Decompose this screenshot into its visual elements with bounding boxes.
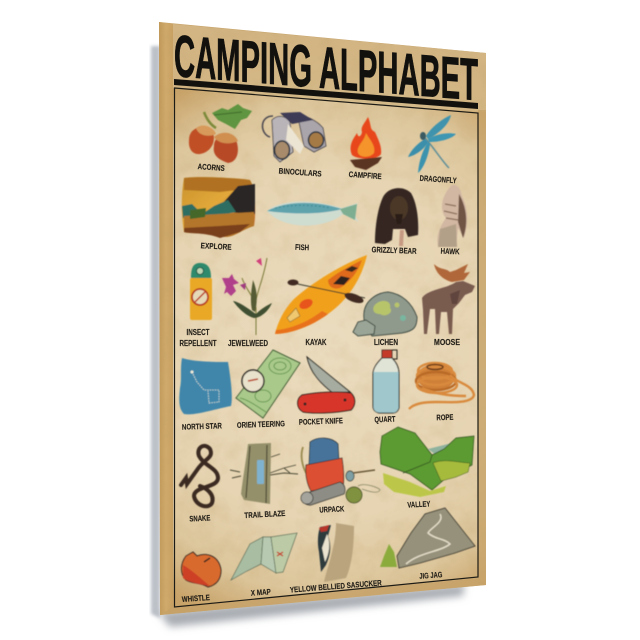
icon: hawk: [437, 185, 467, 247]
item: dragonfly: [408, 115, 457, 185]
item: x map: [231, 533, 297, 598]
icon: campfire: [350, 117, 382, 170]
icon: moose: [422, 264, 475, 334]
item: quart: [373, 350, 399, 424]
icon: mountain with switchback trail: [380, 508, 475, 568]
label: insect repellent: REPELLENT: [180, 339, 217, 348]
label: dragonfly: DRAGONFLY: [419, 174, 457, 185]
label: jewelweed: JEWELWEED: [228, 339, 268, 348]
label: explore: EXPLORE: [200, 241, 232, 252]
icon: backpack and gear: [301, 438, 380, 505]
icon: north star map: [179, 358, 232, 414]
icon: topographic map and compass: [236, 350, 300, 418]
label: valley: VALLEY: [407, 499, 431, 510]
icon: kayak with paddle: [275, 255, 367, 334]
icon: explore landscape: [182, 177, 255, 238]
label: whistle: WHISTLE: [182, 593, 211, 604]
item: snake: [181, 446, 218, 524]
label: rope: ROPE: [436, 413, 454, 422]
icon: binoculars: [262, 112, 326, 162]
label: acorns: ACORNS: [197, 162, 225, 173]
label: quart: QUART: [374, 415, 396, 424]
icon: orange whistle: [182, 552, 221, 587]
item: campfire: [348, 117, 382, 181]
label: fish: FISH: [295, 243, 309, 252]
item: urpack: [301, 438, 380, 515]
label: north star: NORTH STAR: [182, 421, 222, 432]
label: zig zag: JIG JAG: [419, 570, 443, 581]
label: hawk: HAWK: [440, 247, 460, 256]
item: lichen: [353, 292, 417, 347]
label: trail blaze: TRAIL BLAZE: [244, 509, 286, 520]
item: pocket knife: [298, 357, 355, 427]
icon: insect repellent can: [190, 263, 212, 320]
icon: tree with blaze: [230, 443, 298, 504]
item: north star: [179, 358, 232, 432]
icon: snake: [181, 446, 218, 506]
label: campfire: CAMPFIRE: [348, 170, 382, 181]
label: orienteering: ORIEN TEERING: [237, 419, 285, 430]
label: insect repellent: INSECT: [186, 328, 210, 337]
item: insect repellent: [180, 263, 217, 348]
item: kayak: [275, 255, 367, 347]
icon: fish: [267, 202, 359, 226]
label: urpack: URPACK: [319, 504, 345, 515]
item: grizzly bear: [371, 188, 418, 256]
item: yellow bellied sapsucker: [290, 523, 382, 595]
item: orienteering: [236, 350, 300, 430]
label: binoculars: BINOCULARS: [278, 167, 322, 179]
background shadow of canvas: [151, 46, 465, 627]
label: x map: X MAP: [251, 587, 272, 598]
label: grizzly bear: GRIZZLY BEAR: [371, 245, 417, 256]
item: valley: [380, 427, 474, 510]
item: hawk: [437, 185, 467, 256]
title rule: [174, 79, 478, 109]
icon: green valley: [380, 427, 474, 497]
item: whistle: [182, 552, 221, 604]
item: moose: [422, 264, 475, 347]
icon: folded map: [231, 533, 297, 580]
icon: dragonfly: [408, 115, 456, 173]
item: jewelweed: [222, 258, 272, 348]
item: trail blaze: [230, 443, 298, 520]
label: pocket knife: POCKET KNIFE: [299, 416, 344, 427]
item: explore: [182, 177, 255, 252]
icon: woodpecker on trunk: [318, 523, 354, 582]
item: fish: [267, 202, 359, 252]
item: rope: [409, 363, 474, 422]
label: snake: SNAKE: [189, 513, 211, 524]
canvas poster: [159, 22, 486, 615]
inner frame border: [174, 88, 478, 607]
label: kayak: KAYAK: [306, 338, 327, 347]
icon: jewelweed flower: [222, 258, 272, 335]
icon: grizzly bear: [375, 188, 418, 246]
item: zig zag: [380, 508, 475, 581]
label: lichen: LICHEN: [374, 338, 398, 347]
item: binoculars: [262, 112, 326, 179]
icon: coiled rope: [409, 363, 474, 409]
label: yellow bellied sapsucker: YELLOW BELLIED SASUCKER: [290, 578, 382, 595]
icon: acorns: [189, 104, 252, 163]
item: acorns: [189, 104, 252, 173]
label: moose: MOOSE: [434, 338, 461, 347]
label: insect repellent: [180, 328, 217, 348]
icon: lichen rock: [353, 292, 417, 336]
icon: pocket knife: [298, 357, 355, 413]
icon: water bottle: [373, 350, 399, 413]
